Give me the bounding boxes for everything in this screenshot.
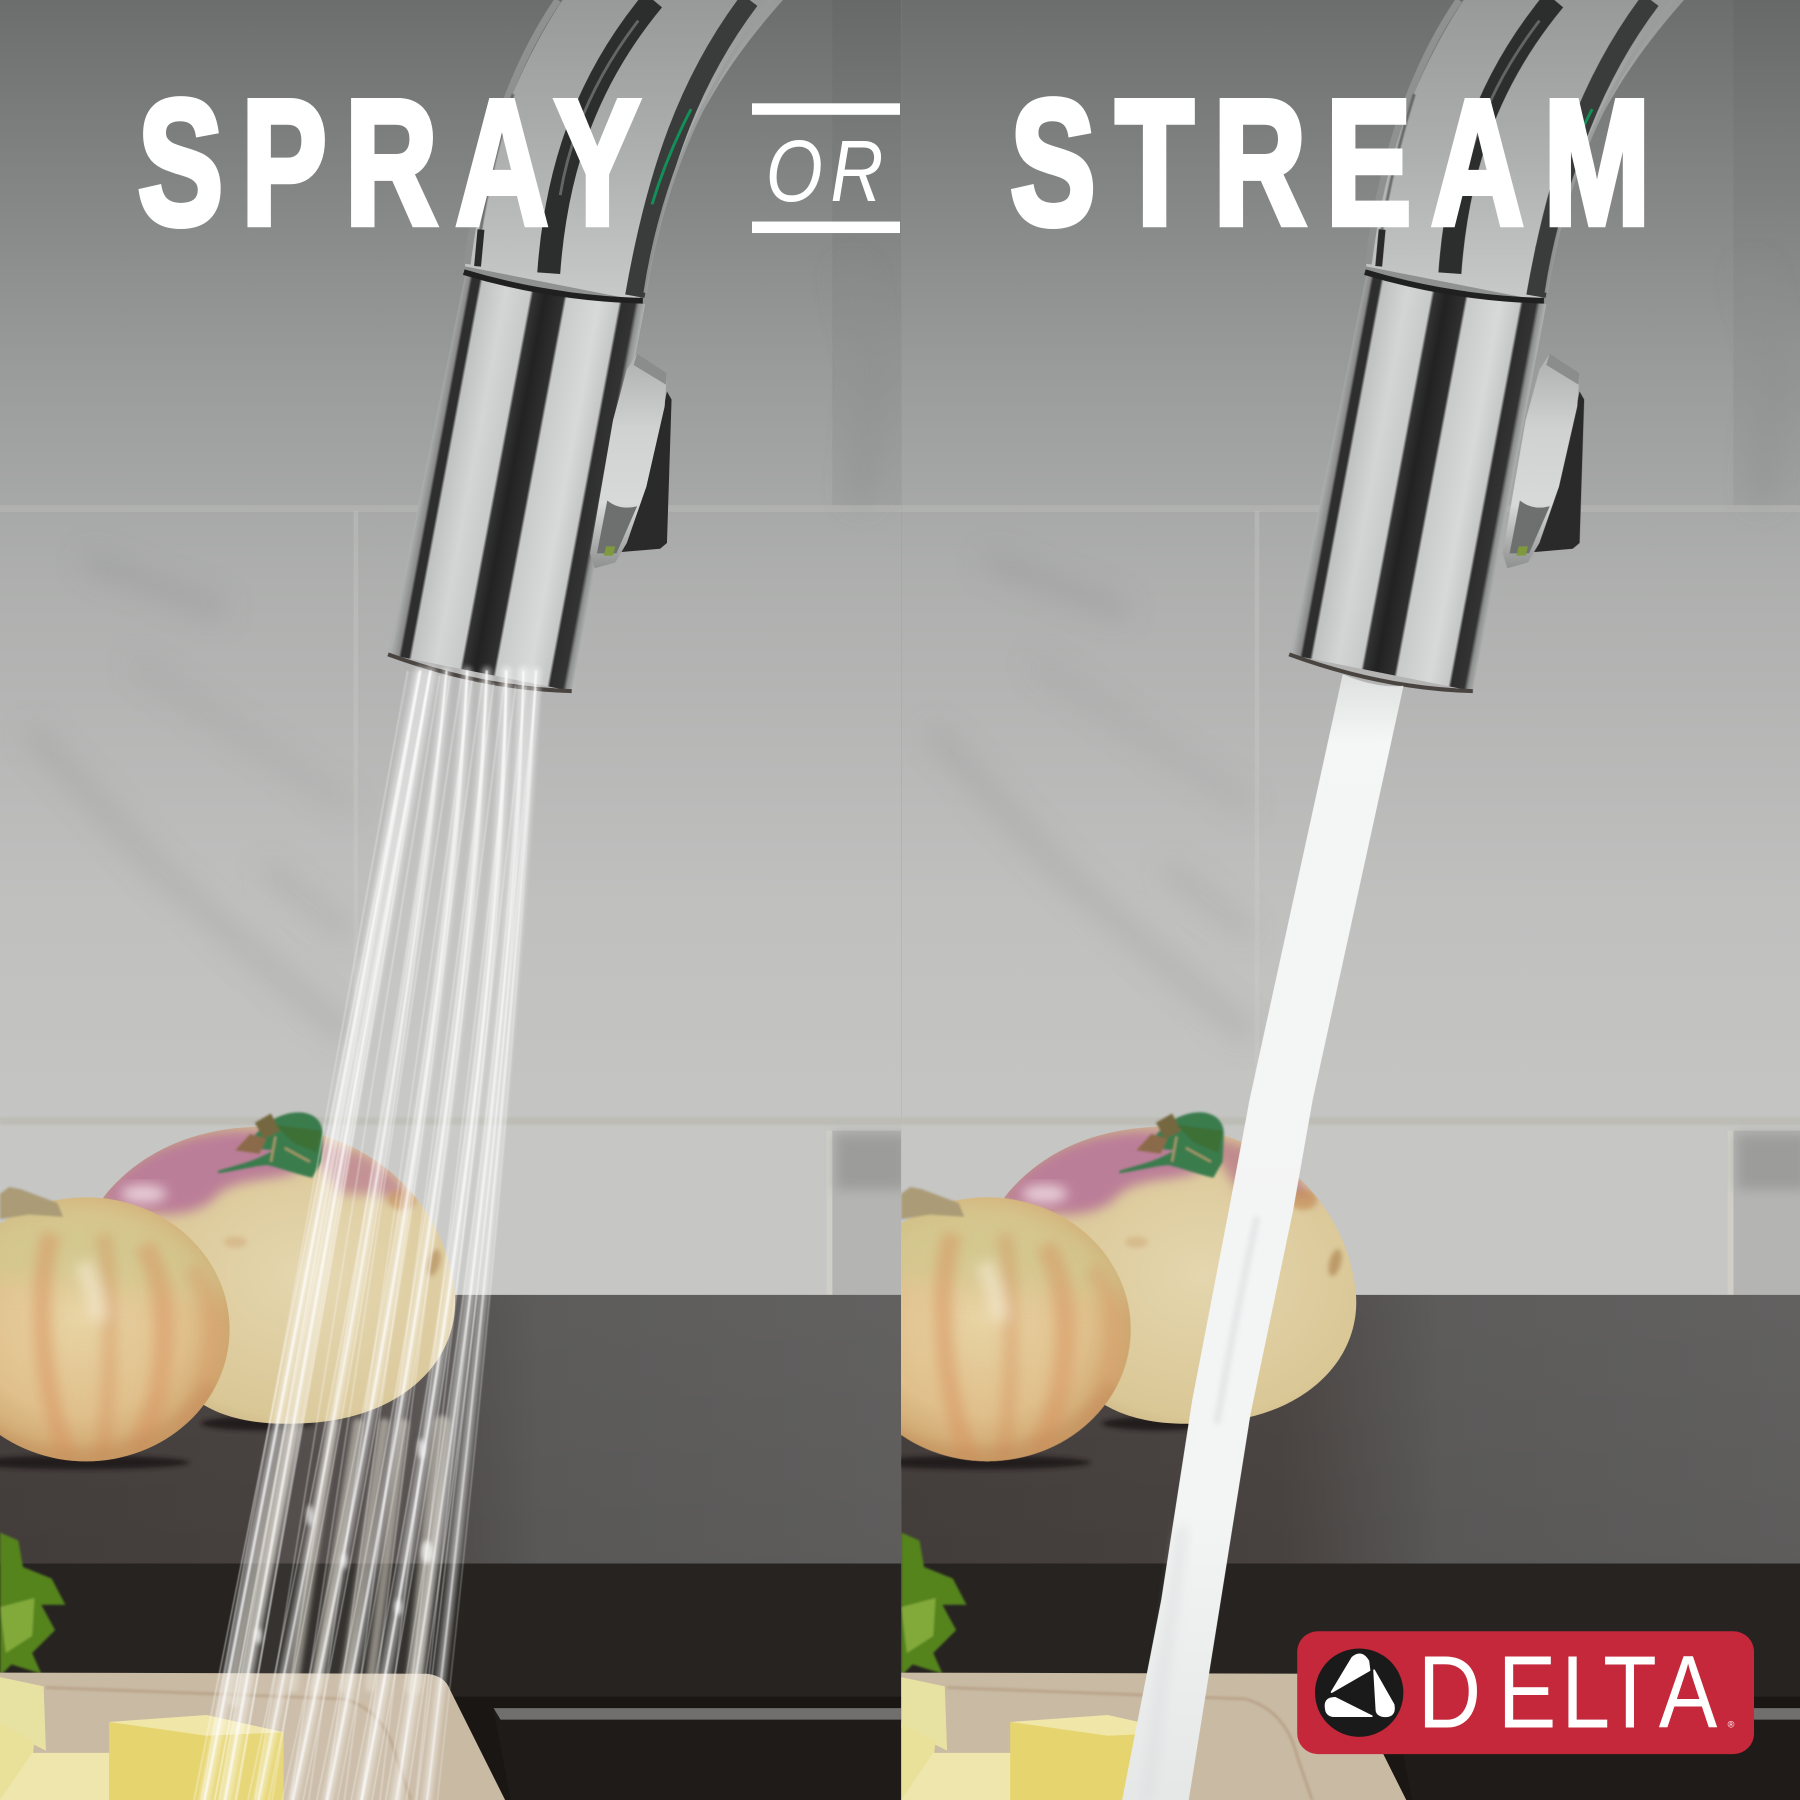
spray water strands bbox=[194, 672, 542, 1800]
kitchen background left bbox=[0, 0, 907, 1800]
kitchen background right bbox=[844, 0, 1800, 1800]
heading: SPRAY: SPRAY bbox=[138, 63, 658, 262]
heading: STREAM: STREAM bbox=[1010, 63, 1670, 262]
solid water stream bbox=[1123, 675, 1403, 1800]
panel: stream side bbox=[844, 0, 1800, 1800]
toggle button right bbox=[1503, 354, 1584, 568]
panel: spray side bbox=[0, 0, 907, 1800]
divider word: OR with rules: OR bbox=[766, 123, 891, 220]
registered mark: ® bbox=[1728, 1720, 1735, 1730]
logo: Delta bbox=[1297, 1631, 1754, 1754]
logo wordmark: DELTA bbox=[1418, 1635, 1717, 1750]
toggle button left bbox=[590, 354, 672, 568]
faucet head left bbox=[388, 0, 783, 691]
divider word: OR with rules bbox=[752, 103, 900, 233]
logo mark bbox=[1315, 1648, 1403, 1737]
faucet head right bbox=[1289, 0, 1684, 691]
